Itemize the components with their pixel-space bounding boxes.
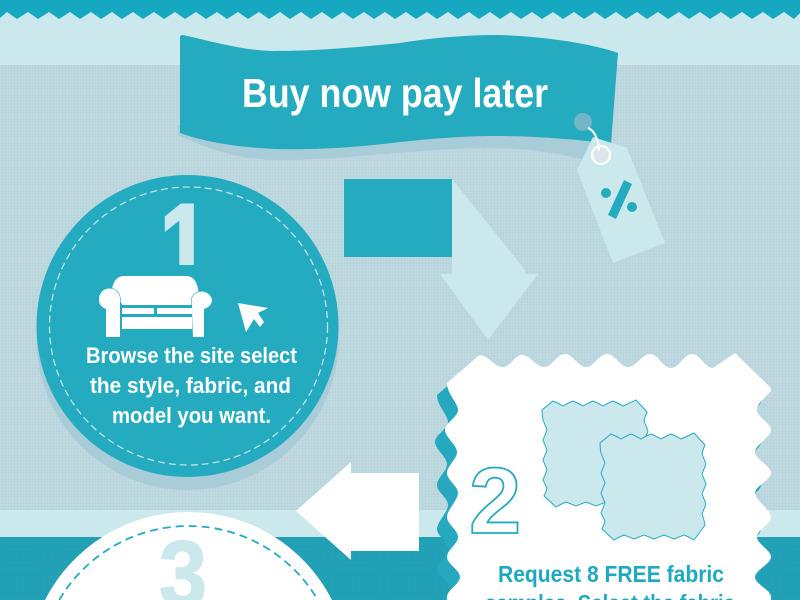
arrow: step 2 to step 3 (296, 462, 419, 560)
step 2 panel (445, 353, 771, 600)
banner shadow (178, 125, 600, 160)
price tag (574, 113, 665, 263)
lower dark section (0, 537, 800, 600)
step 2 text (485, 561, 735, 600)
tag string (588, 128, 599, 151)
arrow: step 1 to step 2 (344, 179, 538, 340)
step 1 text: Browse the site select (86, 343, 298, 368)
step 3 circle (45, 512, 332, 600)
tag pin (574, 113, 592, 131)
title banner (180, 35, 618, 149)
step 1 text: model you want. (112, 403, 271, 428)
title: Buy now pay later (242, 70, 548, 116)
icon: cursor (238, 303, 268, 332)
tag hole (592, 146, 610, 164)
lower light band (0, 510, 800, 538)
step 1 text (86, 343, 298, 428)
top zigzag border (0, 0, 800, 19)
fabric swatch front (600, 433, 706, 540)
icon: sofa (99, 276, 212, 337)
percent icon (601, 180, 637, 219)
top light band (0, 10, 800, 65)
step number 2: 2 (469, 448, 521, 553)
fabric swatch back (542, 400, 648, 507)
step 1 circle (36, 175, 338, 490)
step 1 text: the style, fabric, and (90, 373, 291, 398)
step number 1: 1 (160, 183, 209, 305)
step 2 text: Request 8 FREE fabric (498, 561, 724, 587)
step 2 panel shadow (435, 365, 761, 600)
